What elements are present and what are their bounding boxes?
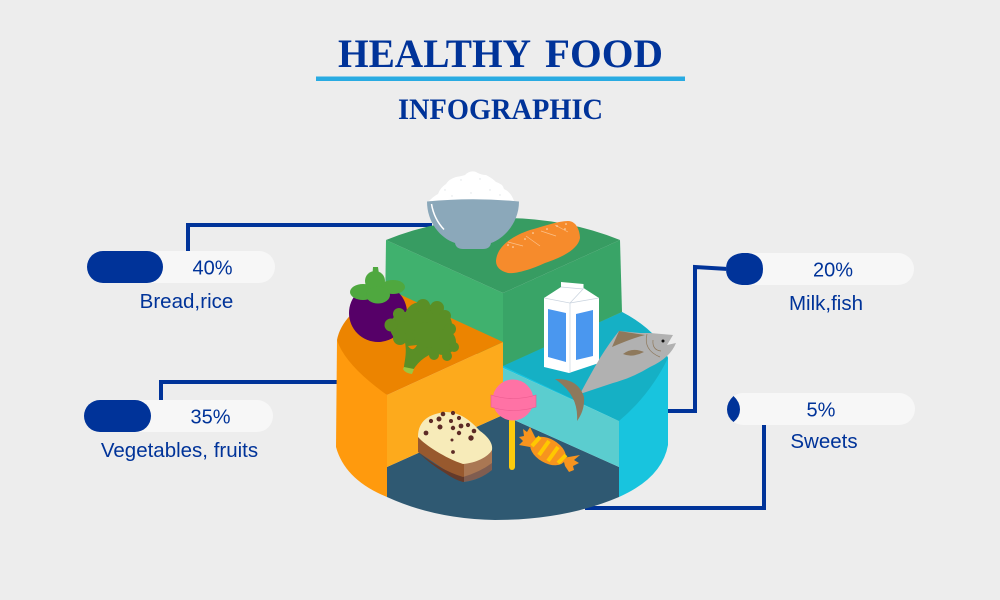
slice: vegetables and fruits — [336, 289, 503, 497]
pie chart: 3D food pyramid — [336, 218, 668, 520]
pill: vegetables, fruits 35% — [84, 400, 273, 432]
icon: mangosteen — [349, 267, 407, 342]
connector: bread, rice — [188, 225, 432, 251]
label: sweets: Sweets — [790, 430, 858, 453]
slice: sweets floor — [387, 415, 619, 520]
subtitle: INFOGRAPHIC — [398, 93, 603, 126]
icon: broccoli — [384, 299, 459, 374]
title: FOOD — [545, 31, 663, 76]
icon: fish — [555, 331, 676, 421]
connector: milk, fish — [666, 267, 728, 411]
pill: milk, fish 20% — [726, 253, 914, 285]
pill: sweets 5%: 5% — [807, 400, 836, 422]
label: bread, rice: Bread, rice — [140, 290, 233, 313]
pill: bread, rice 40%: 40% — [192, 258, 233, 280]
slice: milk and fish — [503, 312, 668, 497]
icon: wrapped candy — [519, 427, 580, 472]
pill: milk, fish 20%: 20% — [813, 260, 853, 282]
connector: vegetables, fruits — [161, 382, 340, 400]
title underline — [316, 76, 685, 81]
icon: bread loaf — [496, 221, 580, 273]
slice: bread and rice — [385, 218, 622, 366]
title — [338, 31, 663, 76]
title: HEALTHY — [338, 31, 531, 76]
connector: sweets — [585, 425, 764, 508]
pill: vegetables, fruits 35%: 35% — [190, 406, 231, 428]
icon: rice bowl — [427, 171, 519, 249]
pill: bread, rice 40% — [87, 251, 275, 283]
icon: lollipop — [491, 380, 536, 470]
label: vegetables, fruits: Vegetables, fruits — [101, 439, 258, 462]
icon: cake slice — [418, 411, 492, 482]
label: milk, fish: Milk, fish — [789, 292, 863, 315]
icon: milk carton — [544, 282, 599, 373]
pill: sweets 5% — [727, 393, 915, 425]
